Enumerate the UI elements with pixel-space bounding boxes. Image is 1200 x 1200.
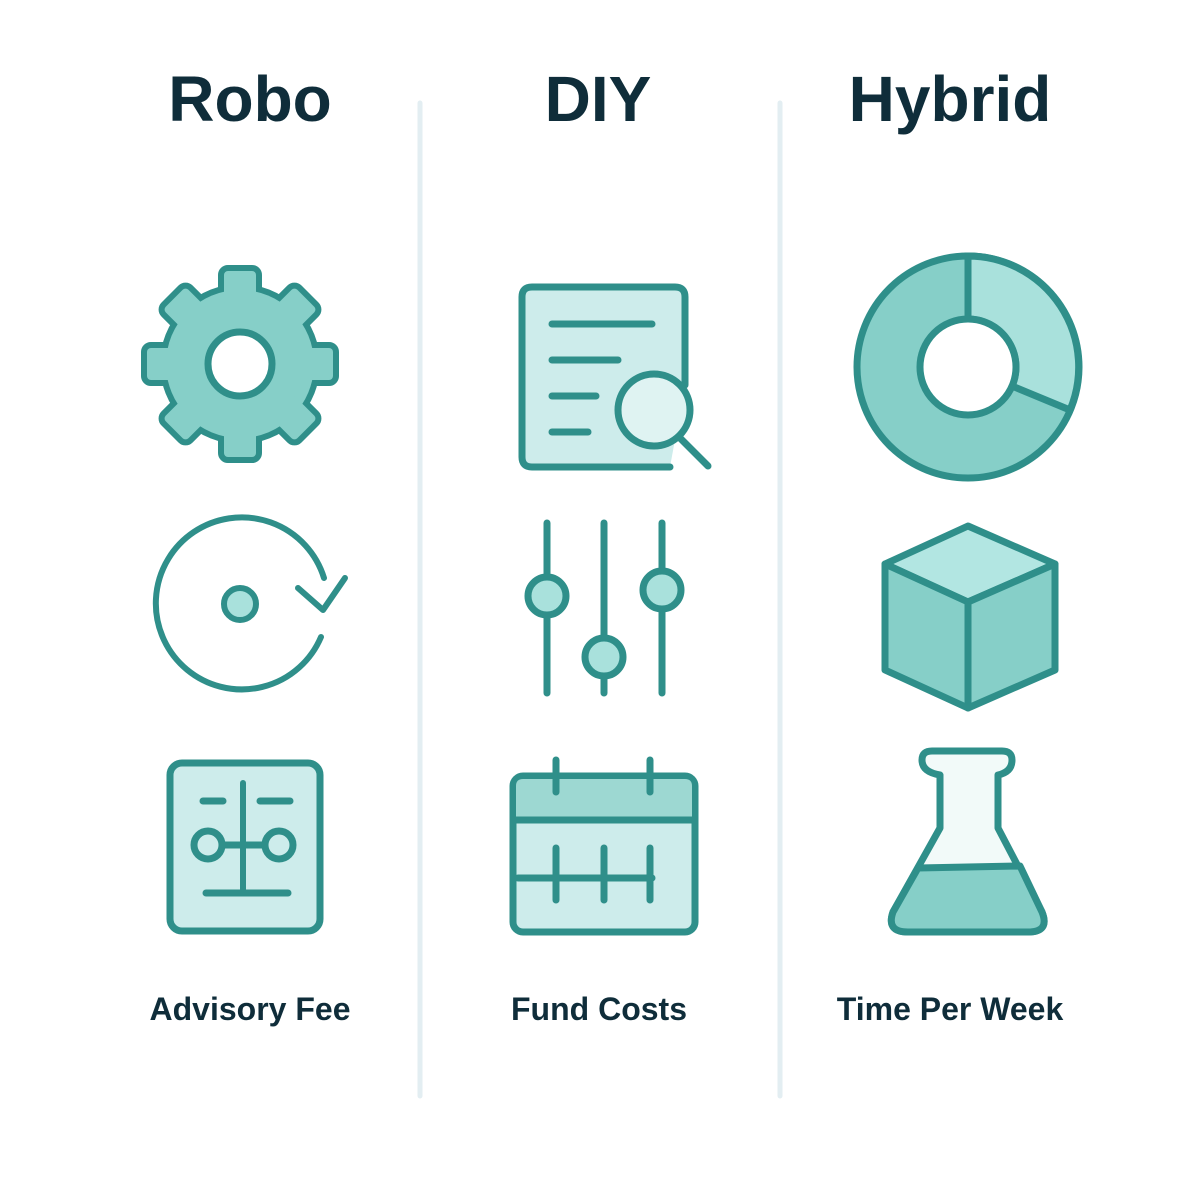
icon: flask [891, 751, 1044, 932]
icon: sliders [528, 523, 681, 693]
icon: document with magnifier [522, 287, 708, 467]
icon: calendar [513, 760, 695, 932]
icon: gear [147, 271, 333, 457]
icon: cube [885, 526, 1055, 708]
title: DIY: DIY [545, 63, 651, 135]
label: Fund Costs: Fund Costs [511, 991, 687, 1027]
icon: donut chart [857, 256, 1079, 478]
title: Robo: Robo [168, 63, 332, 135]
icon: circular arrow [156, 517, 345, 689]
title: Hybrid: Hybrid [849, 63, 1051, 135]
label: Time Per Week: Time Per Week [837, 991, 1063, 1027]
label: Advisory Fee: Advisory Fee [150, 991, 350, 1027]
icon: scales document [170, 763, 320, 931]
